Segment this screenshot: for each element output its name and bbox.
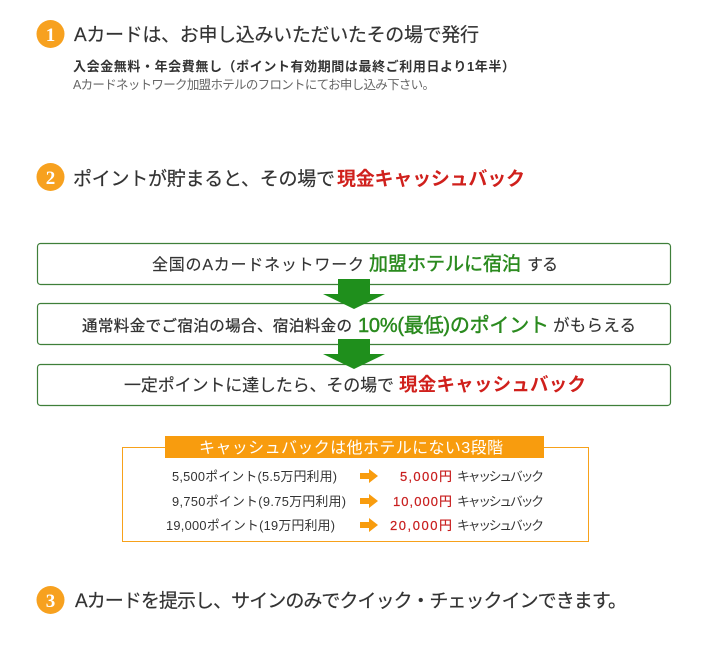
panel: step 3: 一定ポイントに達したら、その場で <box>124 376 394 395</box>
tier row 1: 5,000円 <box>400 469 452 484</box>
tier row 2: 9,750ポイント(9.75万円利用) <box>172 494 346 509</box>
panel: step 3: 現金キャッシュバック <box>399 374 586 395</box>
heading: red highlight: 現金キャッシュバック <box>337 168 525 190</box>
heading: section 2: ポイントが貯まると、その場で <box>73 168 335 190</box>
text: fee details: 入会金無料・年会費無し（ポイント有効期間は最終ご利用日より1年半） <box>73 59 515 74</box>
tier row 2: 10,000円 <box>393 494 452 509</box>
panel header: キャッシュバックは他ホテルにない3段階 <box>199 439 503 457</box>
arrow: step 2 to step 3 <box>323 339 385 369</box>
panel: step 1: 全国のAカードネットワーク <box>152 256 364 274</box>
heading: section 1: Aカードは、お申し込みいただいたその場で発行 <box>74 24 479 46</box>
icon: number badge 2 <box>36 163 64 191</box>
panel: step 2 <box>38 304 670 344</box>
panel: step 1 <box>38 244 670 284</box>
text: application note: Aカードネットワーク加盟ホテルのフロントにてお申し込み下さい。 <box>73 78 435 92</box>
tier row 3: 20,000円 <box>390 518 452 533</box>
heading: section 3: Aカードを提示し、サインのみでクイック・チェックインできます。 <box>75 590 627 612</box>
section 1: card issuance <box>36 20 515 92</box>
tier row 3 <box>166 518 544 533</box>
panel: step 2: 10%(最低)のポイント <box>358 314 549 337</box>
tier row 1 <box>172 469 544 484</box>
arrow: step 1 to step 2 <box>323 279 385 309</box>
icon: number badge 3: 3 <box>46 591 55 612</box>
tier row 1: 5,500ポイント(5.5万円利用) <box>172 469 337 484</box>
tier row 3: 19,000ポイント(19万円利用) <box>166 518 335 533</box>
icon: number badge 1 <box>36 20 64 48</box>
tier row 2 <box>172 494 544 509</box>
tier row 3: キャッシュバック <box>457 518 544 533</box>
panel: cash back tiers <box>122 436 588 542</box>
section 2: cash back heading <box>36 163 525 191</box>
icon: number badge 1: 1 <box>46 25 55 46</box>
panel: step 3 <box>38 364 670 406</box>
section 3: quick check-in <box>36 586 627 614</box>
panel: step 1: 加盟ホテルに宿泊 <box>369 253 521 275</box>
tier row 1: キャッシュバック <box>457 469 544 484</box>
panel: step 2: がもらえる <box>553 316 636 335</box>
tier row 2: キャッシュバック <box>457 494 544 509</box>
icon: number badge 2: 2 <box>46 168 55 189</box>
panel: step 2: 通常料金でご宿泊の場合、宿泊料金の <box>82 317 352 335</box>
icon: number badge 3 <box>36 586 64 614</box>
panel header <box>165 436 544 458</box>
panel: step 1: する <box>527 256 558 274</box>
